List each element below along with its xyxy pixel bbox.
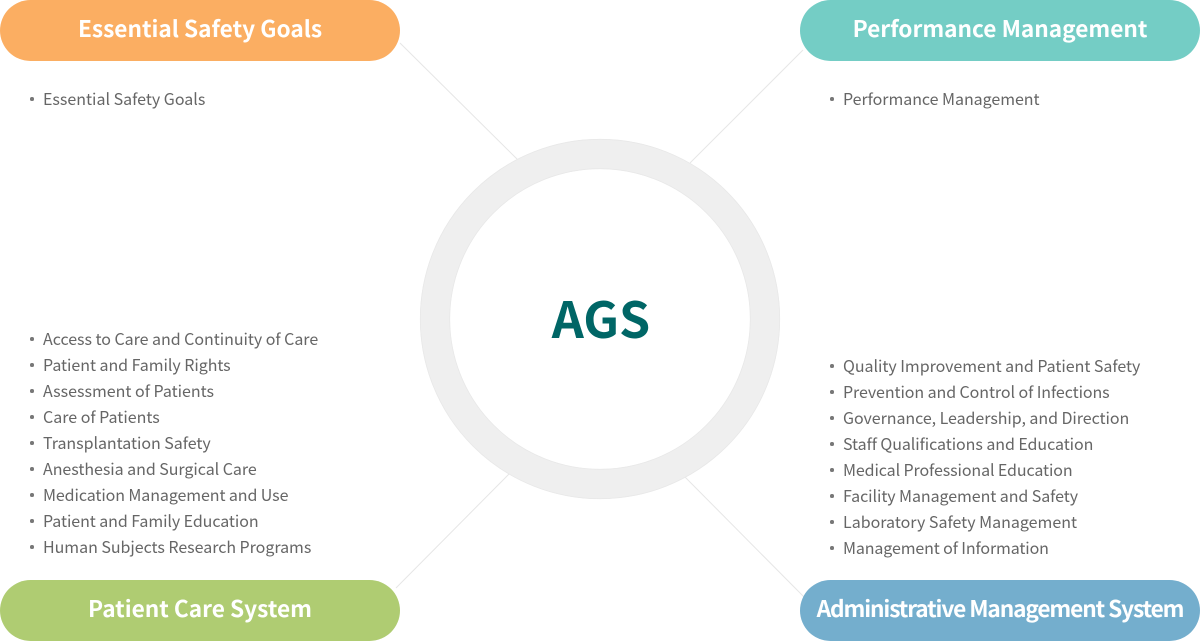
list: Patient Care System: Assessment of Patients [43, 378, 214, 402]
heading pill: Performance Management: Performance Management [853, 11, 1147, 44]
heading pill: Essential Safety Goals: Essential Safety Goals [78, 11, 322, 44]
heading pill: Performance Management [800, 0, 1200, 61]
list: Patient Care System: Transplantation Safety [43, 430, 211, 454]
heading pill: Administrative Management System: Administrative Management System [817, 591, 1183, 624]
list: Patient Care System: Patient and Family Education [43, 508, 259, 532]
list: Essential Safety Goals: Essential Safety Goals [43, 86, 205, 110]
list: Administrative Management System: Governance, Leadership, and Direction [843, 405, 1129, 429]
list: Patient Care System: Human Subjects Research Programs [43, 534, 311, 558]
list: Administrative Management System: Quality Improvement and Patient Safety [843, 353, 1140, 377]
list: Patient Care System [30, 326, 318, 558]
list: Performance Management: Performance Management [843, 86, 1040, 110]
list: Administrative Management System: Management of Information [843, 535, 1049, 559]
list: Patient Care System: Anesthesia and Surgical Care [43, 456, 257, 480]
list: Administrative Management System: Laboratory Safety Management [843, 509, 1077, 533]
list: Administrative Management System: Staff Qualifications and Education [843, 431, 1093, 455]
list: Administrative Management System [830, 353, 1140, 559]
list: Administrative Management System: Facility Management and Safety [843, 483, 1078, 507]
list: Patient Care System: Care of Patients [43, 404, 160, 428]
list: Administrative Management System: Prevention and Control of Infections [843, 379, 1110, 403]
heading pill: Patient Care System: Patient Care System [88, 591, 312, 624]
list: Patient Care System: Access to Care and Continuity of Care [43, 326, 318, 350]
list: Administrative Management System: Medical Professional Education [843, 457, 1073, 481]
list: Patient Care System: Medication Management and Use [43, 482, 288, 506]
heading pill: Patient Care System [0, 580, 400, 641]
center label: AGS: AGS [552, 281, 650, 353]
list: Patient Care System: Patient and Family Rights [43, 352, 231, 376]
heading pill: Administrative Management System [800, 580, 1200, 641]
heading pill: Essential Safety Goals [0, 0, 400, 61]
